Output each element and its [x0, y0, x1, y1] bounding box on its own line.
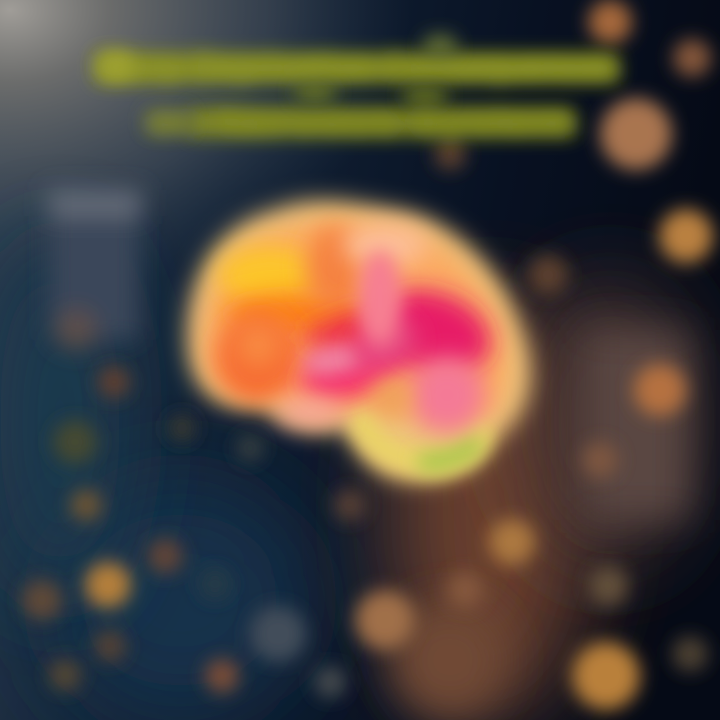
floating particles: top right — [434, 0, 713, 478]
brain: magenta right lobe — [363, 275, 501, 389]
brain: orange body — [204, 220, 508, 422]
brain: central pink fold — [358, 250, 402, 346]
brain: yellow lobe — [218, 246, 322, 306]
brain: top orange lobe — [307, 226, 363, 310]
brain illustration — [187, 201, 531, 481]
title: Sleep Deprivation Consequences — [96, 48, 618, 86]
brain: red-orange left lobe — [216, 314, 300, 402]
brain: lower orange gap — [374, 380, 410, 416]
brain: connector magenta — [345, 311, 425, 379]
title: on Nervous System — [148, 104, 573, 142]
brain: top peach — [343, 225, 427, 265]
brain: green stem highlight — [428, 446, 472, 462]
brain: pink highlight — [301, 341, 369, 379]
panel: right side box — [585, 330, 690, 520]
brain: orange band — [225, 294, 365, 334]
title — [96, 34, 618, 142]
brain: pale halo — [187, 201, 531, 481]
icon: glass or container on the left — [48, 190, 142, 350]
brain: lower pink lobe — [409, 357, 485, 433]
brain: lower stem yellow arc — [362, 420, 480, 462]
floating particles: bottom — [22, 366, 708, 710]
brain: lower-left pale pink — [276, 398, 344, 426]
brain: crimson mid lobe — [296, 320, 410, 402]
